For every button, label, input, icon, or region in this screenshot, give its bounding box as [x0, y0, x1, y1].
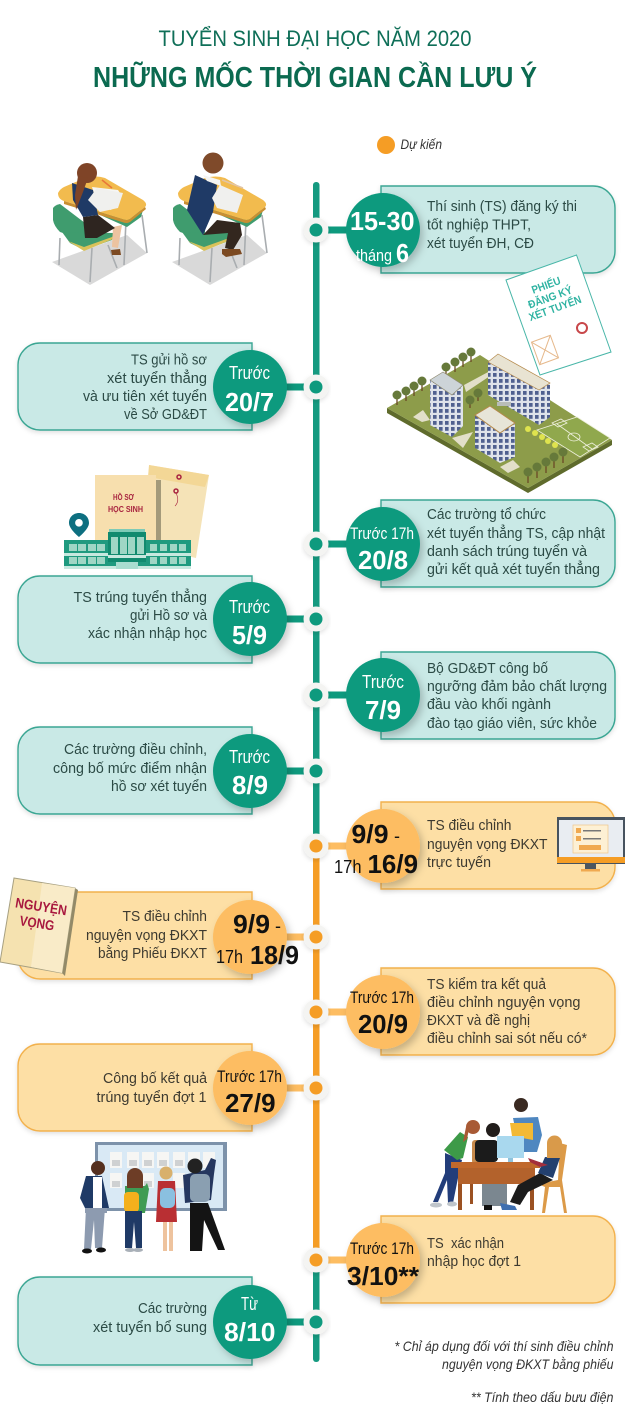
date badge text: 8/9	[232, 770, 268, 800]
description	[96, 1070, 208, 1106]
description: ĐKXT và đề nghị	[427, 1012, 530, 1029]
description	[427, 506, 606, 578]
description	[93, 1300, 207, 1336]
date badge text: 3/10**	[347, 1261, 420, 1291]
description: đầu vào khối ngành	[427, 696, 551, 713]
student: girl	[72, 163, 123, 255]
card	[18, 1044, 252, 1131]
panel: trước 17h 20/9	[304, 968, 615, 1055]
description: nhập học đợt 1	[427, 1253, 521, 1270]
icon: registration form: PHIẾU	[530, 274, 563, 297]
card	[18, 892, 252, 979]
date badge text: 15-30	[350, 206, 414, 236]
timeline axis	[313, 182, 320, 1362]
panel: 15-30/6	[304, 186, 615, 273]
location pin	[69, 513, 89, 537]
description: TS xác nhận	[427, 1235, 504, 1252]
computer screen	[497, 1136, 524, 1163]
description	[53, 741, 207, 795]
node	[304, 1310, 328, 1334]
card	[381, 500, 615, 587]
description	[427, 817, 548, 871]
icon: student records and school	[64, 465, 209, 569]
description	[74, 588, 208, 642]
legend: projected dates: Dự kiến	[400, 136, 442, 152]
date badge text: 20/7	[225, 387, 274, 417]
school building	[64, 529, 191, 569]
title	[93, 26, 537, 94]
footnotes	[394, 1338, 614, 1405]
description: TS gửi hồ sơ	[131, 352, 207, 368]
panel: trước 17h 3/10	[304, 1216, 615, 1303]
description: công bố mức điểm nhận	[53, 760, 207, 777]
description: hồ sơ xét tuyển	[111, 778, 207, 795]
node	[304, 682, 328, 708]
description: TS kiểm tra kết quả	[427, 976, 547, 993]
icon: isometric campus	[387, 348, 612, 493]
date badge text: 17h	[216, 947, 243, 967]
building back	[488, 354, 550, 425]
student: red dress	[156, 1166, 177, 1251]
student: boy	[187, 152, 243, 257]
description: tốt nghiệp THPT,	[427, 216, 531, 234]
date badge text: 6	[396, 238, 409, 268]
icon: group studying at table	[430, 1098, 567, 1213]
panel: trước 5/9	[18, 576, 328, 663]
date badge text	[347, 1240, 420, 1291]
date badge text	[362, 672, 404, 725]
date badge text: -	[275, 916, 281, 936]
date badge text	[350, 206, 414, 268]
card	[18, 343, 252, 430]
description: gửi kết quả xét tuyển thẳng	[427, 560, 600, 578]
date badge text	[350, 989, 414, 1039]
description: Công bố kết quả	[103, 1070, 208, 1087]
date badge text: Trước 17h	[350, 525, 414, 543]
description: xét tuyển bổ sung	[93, 1319, 207, 1336]
card	[381, 652, 615, 739]
date badge text	[229, 747, 270, 800]
description: Các trường tổ chức	[427, 506, 546, 523]
seated student chair	[472, 1140, 480, 1164]
date badge text: Từ	[241, 1294, 258, 1314]
icon: registration form	[506, 255, 611, 375]
panel: trước 17h 27/9	[18, 1044, 328, 1131]
title: NHỮNG MỐC THỜI GIAN CẦN LƯU Ý	[93, 60, 537, 94]
description	[427, 1235, 521, 1270]
icon: registration form: XÉT TUYỂN	[527, 293, 583, 324]
description: TS điều chỉnh	[427, 817, 512, 834]
date badge text: 9/9	[352, 819, 388, 849]
node	[304, 1248, 328, 1272]
description: trực tuyến	[427, 854, 491, 871]
date badge text: 18/9	[250, 940, 299, 970]
date badge text	[225, 363, 274, 417]
description: xét tuyển thẳng TS, cập nhật	[427, 524, 606, 542]
panel: trước 17h 20/8	[304, 500, 615, 587]
icon: student records and school: HỌC SINH	[108, 504, 143, 514]
student: standing with book	[510, 1098, 542, 1152]
panel: 9/9 - 18/9 paper form	[18, 892, 328, 979]
title: TUYỂN SINH ĐẠI HỌC NĂM 2020	[158, 26, 472, 51]
icon: students at notice board	[80, 1142, 227, 1254]
description: gửi Hồ sơ và	[130, 607, 208, 624]
student: yellow backpack	[124, 1168, 149, 1252]
description: xác nhận nhập học	[88, 625, 207, 642]
description: đào tạo giáo viên, sức khỏe	[427, 715, 597, 732]
description: bằng Phiếu ĐKXT	[98, 945, 207, 962]
card	[381, 802, 615, 889]
description: và ưu tiên xét tuyển	[83, 388, 207, 405]
date badge text	[350, 525, 414, 575]
description	[86, 908, 207, 962]
date badge text: 7/9	[365, 695, 401, 725]
card	[381, 968, 615, 1055]
node	[304, 374, 328, 400]
date badge text: Trước 17h	[350, 989, 414, 1007]
description	[427, 976, 587, 1047]
description: TS điều chỉnh	[122, 908, 207, 925]
date badge text	[229, 597, 270, 650]
legend: projected dates	[377, 136, 442, 154]
description: Các trường điều chỉnh,	[64, 741, 207, 758]
date badge text: 17h	[334, 857, 362, 877]
description: Các trường	[138, 1300, 207, 1317]
student: grey backpack	[183, 1158, 225, 1251]
description: Thí sinh (TS) đăng ký thi	[427, 198, 577, 215]
icon: wishes booklet: NGUYỆN	[14, 893, 68, 918]
description: nguyện vọng ĐKXT	[427, 836, 548, 853]
card	[18, 727, 252, 814]
node	[304, 1000, 328, 1024]
date badge text: Trước 17h	[350, 1240, 414, 1258]
date badge text: Trước	[229, 363, 270, 383]
description: danh sách trúng tuyển và	[427, 543, 588, 560]
card	[18, 1277, 252, 1365]
node	[304, 758, 328, 784]
icon: registration form: ĐĂNG KÝ	[526, 283, 575, 311]
icon: computer monitor	[557, 817, 625, 872]
node	[304, 532, 328, 556]
date badge text: -	[394, 826, 400, 846]
date badge text	[334, 819, 418, 879]
table	[451, 1162, 540, 1210]
date badge text: tháng	[356, 247, 392, 265]
description: Bộ GD&ĐT công bố	[427, 660, 549, 677]
date badge text: 20/8	[358, 545, 408, 575]
date badge text: Trước	[229, 597, 270, 617]
description: về Sở GD&ĐT	[124, 406, 207, 423]
panel: từ 8/10	[18, 1277, 328, 1365]
description: nguyện vọng ĐKXT	[86, 927, 207, 944]
icon: student records and school: HỒ SƠ	[113, 491, 135, 502]
date badge text: 27/9	[225, 1088, 276, 1118]
panel: trước 8/9	[18, 727, 328, 814]
node	[304, 218, 328, 242]
panel: trước 20/7	[18, 343, 328, 430]
card	[381, 1216, 615, 1303]
date badge text	[224, 1294, 276, 1347]
node	[304, 834, 328, 858]
panel: trước 7/9	[304, 652, 615, 739]
student: seated black shirt	[475, 1123, 517, 1210]
student: left	[80, 1161, 109, 1254]
node	[304, 924, 328, 950]
student: seated reading	[510, 1136, 567, 1213]
description: ngưỡng đảm bảo chất lượng	[427, 678, 607, 695]
description: TS trúng tuyển thẳng	[74, 588, 207, 606]
building front	[475, 402, 515, 463]
date badge text: 20/9	[358, 1009, 408, 1039]
date badge text: Trước 17h	[217, 1068, 282, 1086]
icon: wishes booklet: VỌNG	[19, 912, 56, 934]
date badge text: 8/10	[224, 1317, 276, 1347]
date badge text: Trước	[362, 672, 404, 692]
description	[427, 198, 577, 252]
description: điều chỉnh nguyện vọng	[427, 994, 580, 1011]
description	[83, 352, 207, 423]
node	[304, 606, 328, 632]
building left	[430, 372, 463, 437]
date badge text: Trước	[229, 747, 270, 767]
date badge text: 5/9	[232, 620, 267, 650]
icon: wishes booklet	[0, 878, 78, 976]
description: điều chỉnh sai sót nếu có*	[427, 1030, 587, 1047]
description	[427, 660, 607, 732]
node	[304, 1076, 328, 1100]
date badge text: 16/9	[368, 849, 418, 879]
description: xét tuyển ĐH, CĐ	[427, 235, 534, 252]
date badge text: 9/9	[233, 909, 270, 939]
card	[18, 576, 252, 663]
student: green shirt	[430, 1120, 480, 1208]
date badge text	[217, 1068, 282, 1118]
description: trúng tuyển đợt 1	[96, 1089, 206, 1106]
panel: 9/9 - 16/9 online	[304, 802, 615, 889]
icon: two students at exam desks	[52, 152, 267, 285]
date badge text	[216, 909, 299, 970]
card	[381, 186, 615, 273]
description: xét tuyển thẳng	[107, 369, 207, 387]
footnotes: ** Tính theo dấu bưu điện	[471, 1389, 614, 1405]
